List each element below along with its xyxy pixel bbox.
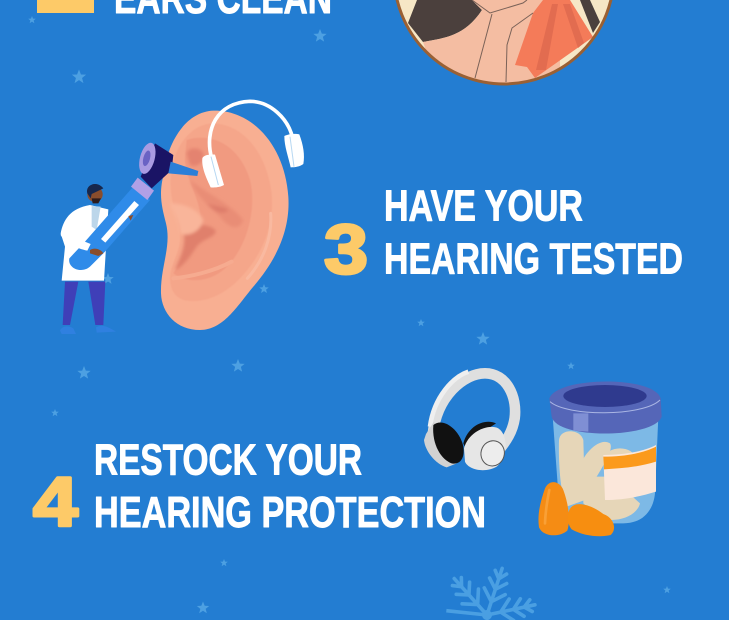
step 4 number: 4: [33, 463, 78, 541]
doctor: [60, 184, 116, 334]
jar label: [603, 445, 656, 500]
lid: [549, 381, 662, 434]
step 3 heading: HAVE YOUR: [384, 182, 583, 230]
illustration: jar of ear plugs: [538, 381, 662, 536]
step 3 number: 3: [324, 210, 368, 288]
orange ear plugs: [538, 482, 614, 536]
icon: snowflake: [438, 554, 548, 620]
step 2 number: [37, 0, 94, 13]
ear: [161, 111, 289, 330]
ear plugs in jar: [559, 431, 640, 520]
illustration: headphones: [424, 372, 515, 470]
illustration: ear, doctor and otoscope: [60, 101, 304, 334]
step 4 heading: HEARING PROTECTION: [94, 488, 486, 537]
otoscope: [61, 141, 198, 270]
illustration: person with towel in circle: [394, 0, 614, 90]
step 4 heading: [94, 436, 486, 537]
step 4 heading: RESTOCK YOUR: [94, 436, 362, 484]
step 3 heading: [384, 182, 683, 284]
hearing device: [202, 101, 304, 187]
